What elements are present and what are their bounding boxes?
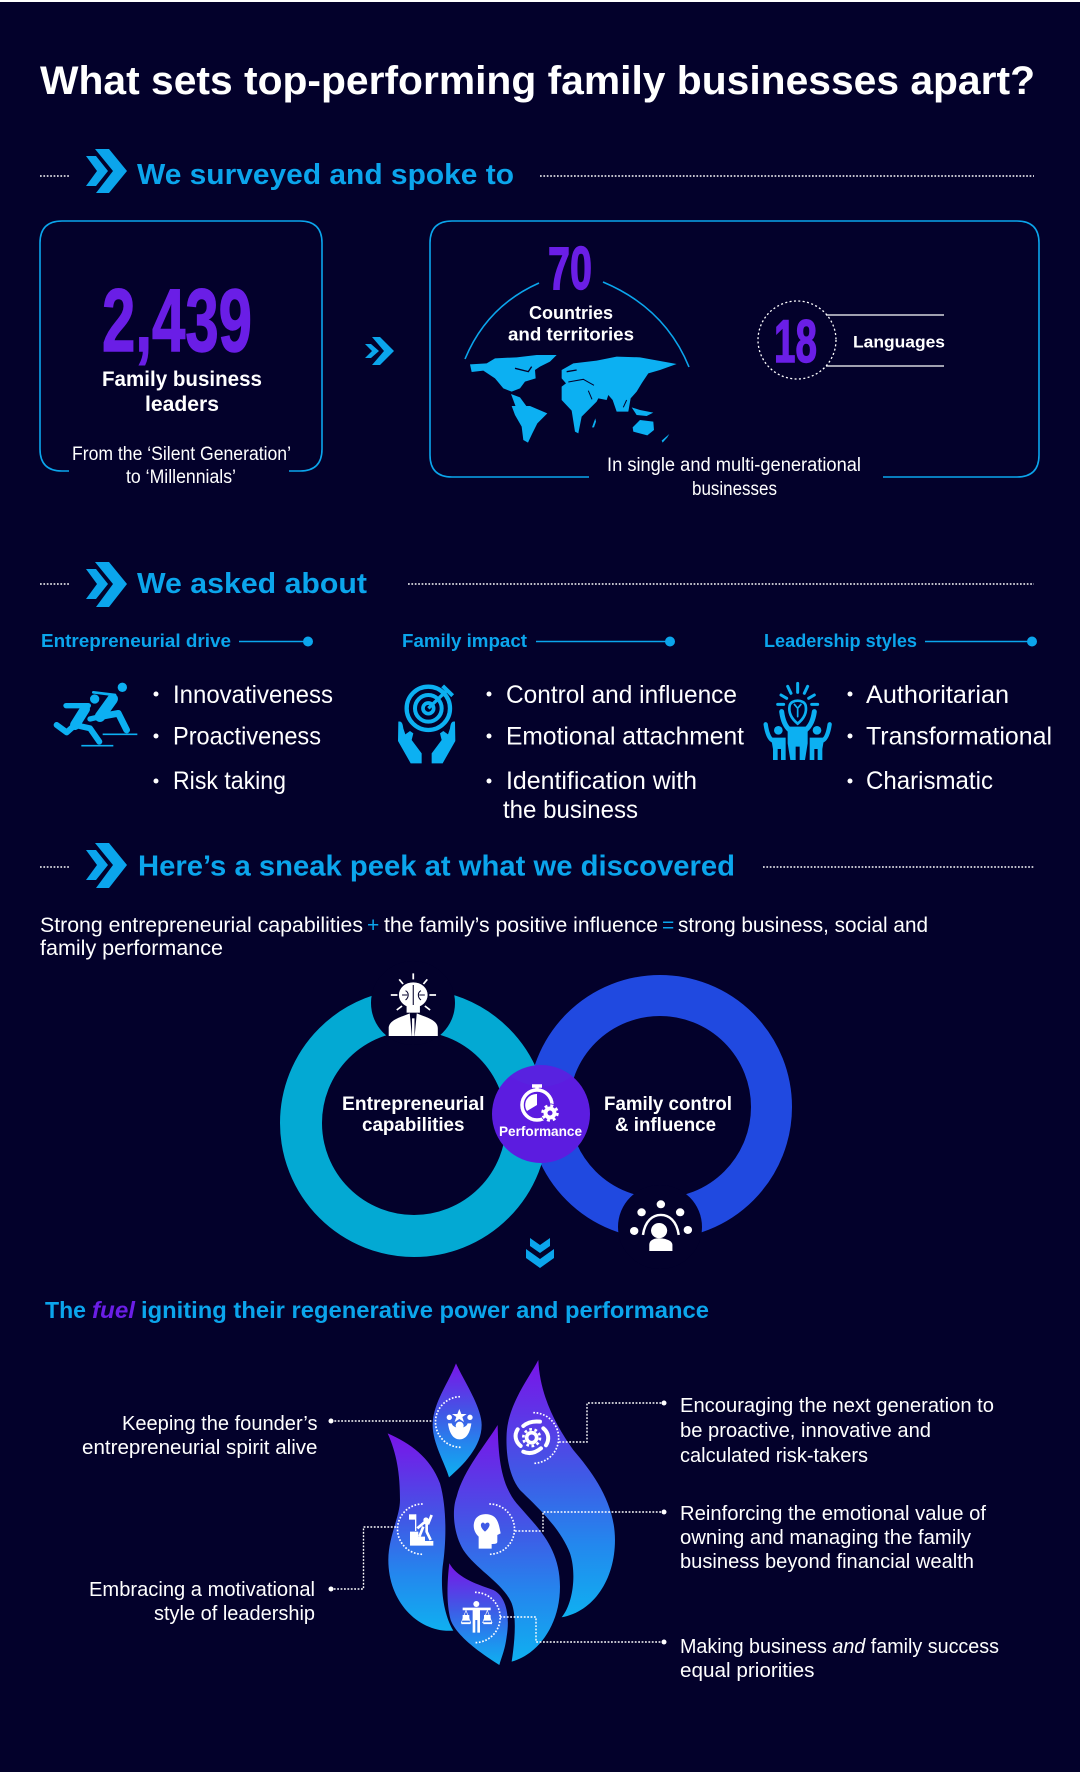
- icon: runners: [57, 683, 137, 746]
- callout: motivational leadership: [89, 1527, 396, 1625]
- label: family control and influence: & influence: [615, 1115, 716, 1136]
- list: leadership items: Authoritarian: [866, 681, 1009, 709]
- diagram: flame: [388, 1360, 615, 1665]
- panel: family business leaders: [40, 221, 322, 488]
- section: we asked about: [40, 562, 1034, 607]
- icon: brain bulb person: [389, 973, 438, 1036]
- heading: sneak peek: Here’s a sneak peek at what we discovered: [138, 850, 735, 882]
- arrow: down chevrons: [526, 1238, 554, 1268]
- column: family impact: [398, 631, 744, 824]
- label: family business leaders: leaders: [145, 393, 219, 416]
- text: findings summary: strong business, social and: [678, 914, 928, 937]
- center circle: performance: [492, 1065, 590, 1163]
- note: businesses: In single and multi-generational: [607, 455, 861, 476]
- label: family control and influence: Family control: [604, 1094, 732, 1115]
- label: entrepreneurial capabilities: Entrepreneurial: [342, 1094, 484, 1115]
- column: entrepreneurial drive: [41, 631, 333, 795]
- text: findings summary: Strong entrepreneurial capabilities: [40, 914, 363, 937]
- ring: entrepreneurial capabilities: [301, 1010, 527, 1236]
- flame: top drop: [433, 1363, 482, 1477]
- heading: we asked about: We asked about: [137, 568, 367, 600]
- callout: emotional value: owning and managing the family: [680, 1527, 971, 1549]
- icon: balance person: [461, 1601, 492, 1633]
- callout: founder's spirit: entrepreneurial spirit alive: [82, 1437, 318, 1459]
- label: languages: Languages: [853, 332, 945, 352]
- label: countries and territories: [508, 303, 634, 344]
- callout: emotional value: Reinforcing the emotional value of: [680, 1503, 986, 1525]
- subheading: family impact: [402, 631, 675, 651]
- label: languages: [826, 315, 945, 366]
- callout: emotional value: business beyond financial wealth: [680, 1551, 974, 1573]
- text: findings summary: the family’s positive influence: [384, 914, 658, 937]
- label: entrepreneurial capabilities: [342, 1094, 484, 1136]
- label: entrepreneurial capabilities: capabilities: [362, 1115, 464, 1136]
- icon: climber on steps: [409, 1514, 433, 1546]
- label: family business leaders: Family business: [102, 368, 262, 391]
- text: findings summary: +: [367, 914, 379, 937]
- list: entrepreneurial items: Risk taking: [173, 767, 286, 795]
- callout: next generation: be proactive, innovative and: [680, 1420, 931, 1442]
- panel: countries and languages: [430, 221, 1039, 500]
- arc above map: [465, 282, 689, 367]
- label: countries and territories: and territories: [508, 324, 634, 344]
- list: family impact items: Control and influence: [506, 681, 737, 709]
- number: 70: 70: [548, 235, 592, 302]
- flame: right: [506, 1360, 615, 1617]
- list: entrepreneurial items: Innovativeness: [173, 681, 333, 709]
- callout: founder's spirit: Keeping the founder’s: [122, 1413, 318, 1435]
- callout: business and family success: Making business and family success: [680, 1636, 999, 1658]
- list: entrepreneurial items: [154, 681, 333, 795]
- list: leadership items: Transformational: [866, 722, 1052, 750]
- flame: bottom: [447, 1563, 508, 1665]
- title: What sets top-performing family businesses apart?: [40, 59, 1035, 103]
- list: family impact items: Identification with: [506, 767, 697, 795]
- icon: hands and gear: [516, 1421, 548, 1453]
- flame: middle: [454, 1425, 560, 1662]
- circle: languages count: [758, 301, 836, 379]
- dashed icon rings: [397, 1397, 559, 1643]
- icon: people and light bulb: [766, 683, 830, 760]
- list: family impact items: Emotional attachment: [506, 722, 744, 750]
- icon: heading chevrons: [86, 562, 127, 607]
- callout: next generation: Encouraging the next generation to: [680, 1395, 994, 1417]
- subheading: leadership styles: [764, 631, 1037, 651]
- section: we surveyed and spoke to: [40, 149, 1034, 193]
- heading: the fuel: igniting their regenerative power and performance: [141, 1297, 709, 1323]
- list: leadership items: Charismatic: [866, 767, 993, 795]
- text: findings summary: [40, 914, 928, 960]
- icon: heading chevrons: [86, 843, 127, 888]
- list: family impact items: [486, 681, 744, 824]
- subheading: leadership styles: Leadership styles: [764, 631, 917, 651]
- heading: we surveyed and spoke to: We surveyed and spoke to: [137, 159, 514, 191]
- icon: heading chevrons: [86, 149, 127, 193]
- note: generations: to ‘Millennials’: [126, 467, 236, 488]
- text: findings summary: family performance: [40, 937, 223, 960]
- number: 2,439: 2,439: [102, 270, 252, 370]
- heading: the fuel: The: [45, 1297, 86, 1323]
- icon: head with heart: [474, 1514, 501, 1549]
- ring cutouts: [371, 961, 702, 1269]
- diagram: overlapping rings: [301, 961, 772, 1269]
- world map: [470, 355, 677, 443]
- subheading: entrepreneurial drive: [41, 631, 313, 651]
- circle: languages count: 18: [774, 308, 817, 375]
- callout: motivational leadership: Embracing a motivational: [89, 1579, 315, 1601]
- label: countries and territories: Countries: [529, 303, 613, 323]
- label: family business leaders: [102, 368, 262, 416]
- callout: founder's spirit: [82, 1413, 433, 1459]
- ring: family control: [548, 996, 772, 1218]
- label: family control and influence: [604, 1094, 732, 1136]
- column: leadership styles: [764, 631, 1052, 795]
- subheading: entrepreneurial drive: Entrepreneurial drive: [41, 631, 231, 651]
- callout: emotional value: [515, 1503, 986, 1573]
- list: leadership items: [848, 681, 1052, 795]
- arrow: panels connector: [365, 337, 394, 365]
- subheading: family impact: Family impact: [402, 631, 527, 651]
- list: entrepreneurial items: Proactiveness: [173, 722, 321, 750]
- callout: business and family success: equal priorities: [680, 1660, 814, 1682]
- note: businesses: [607, 455, 861, 500]
- icon: cheering person with stars: [447, 1409, 473, 1439]
- note: generations: [72, 444, 291, 488]
- callout: next generation: [559, 1395, 994, 1467]
- note: businesses: businesses: [692, 479, 777, 500]
- note: generations: From the ‘Silent Generation’: [72, 444, 291, 465]
- callout: next generation: calculated risk-takers: [680, 1445, 868, 1467]
- text: findings summary: =: [662, 914, 674, 937]
- callout: business and family success: [500, 1617, 999, 1682]
- callout: motivational leadership: style of leadership: [154, 1603, 315, 1625]
- icon: stopwatch and gear: [522, 1086, 558, 1122]
- section: sneak peek: [40, 843, 1034, 888]
- icon: target in hands: [398, 686, 455, 763]
- list: family impact items: the business: [503, 796, 638, 824]
- label: performance: Performance: [499, 1123, 582, 1139]
- icon: family network: [630, 1200, 692, 1251]
- flame: left: [388, 1433, 453, 1631]
- heading: the fuel: fuel: [92, 1297, 136, 1323]
